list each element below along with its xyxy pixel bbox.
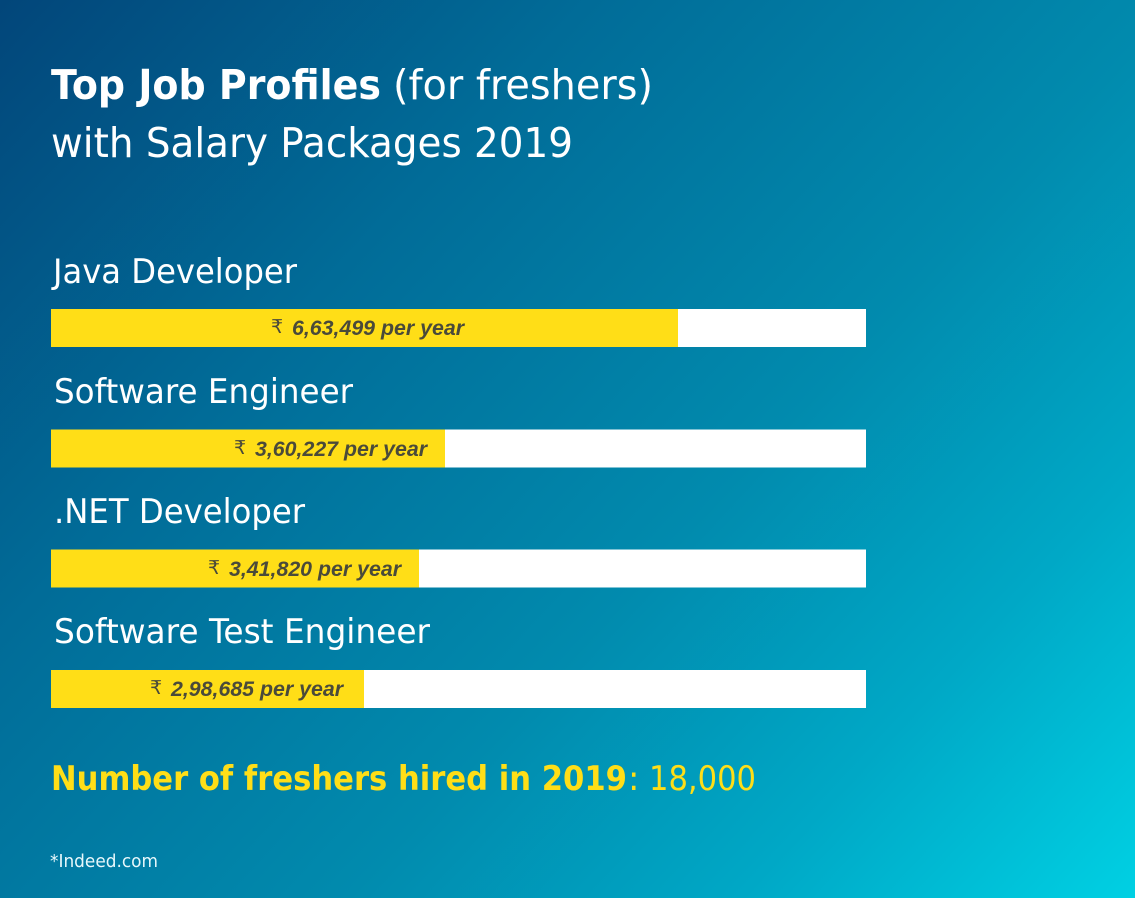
- freshers hired callout: 18,000: [649, 759, 756, 799]
- label: Java Developer: [51, 252, 297, 292]
- bar value: [51, 670, 364, 708]
- source note: *Indeed.com: [50, 851, 158, 872]
- rupee sign: ₹: [271, 316, 283, 338]
- salary: 2,98,685 per year: [170, 677, 345, 701]
- salary: 3,60,227 per year: [255, 437, 429, 461]
- bar track: [51, 550, 866, 588]
- rupee sign: ₹: [150, 677, 162, 699]
- label: .NET Developer: [54, 492, 305, 532]
- bar track: [51, 430, 866, 468]
- freshers hired callout: :: [628, 759, 639, 799]
- panel: .NET Developer: [51, 492, 866, 588]
- bar value: [51, 309, 678, 347]
- title: [51, 61, 653, 167]
- salary: 3,41,820 per year: [229, 557, 403, 581]
- title: with Salary Packages 2019: [51, 119, 573, 167]
- bar track: [51, 309, 866, 347]
- salary: 6,63,499 per year: [292, 316, 466, 340]
- bar value: [51, 550, 419, 588]
- bar value: [51, 430, 445, 468]
- rupee sign: ₹: [208, 557, 220, 579]
- rupee sign: ₹: [234, 437, 246, 459]
- freshers hired callout: Number of freshers hired in 2019: [51, 759, 627, 799]
- panel: Software Engineer: [51, 372, 866, 468]
- bar track: [51, 670, 866, 708]
- title: (for freshers): [393, 61, 653, 109]
- label: Software Engineer: [54, 372, 353, 412]
- panel: Java Developer: [51, 252, 866, 347]
- panel: Software Test Engineer: [51, 612, 866, 708]
- title: Top Job Profiles: [51, 61, 381, 109]
- label: Software Test Engineer: [54, 612, 430, 652]
